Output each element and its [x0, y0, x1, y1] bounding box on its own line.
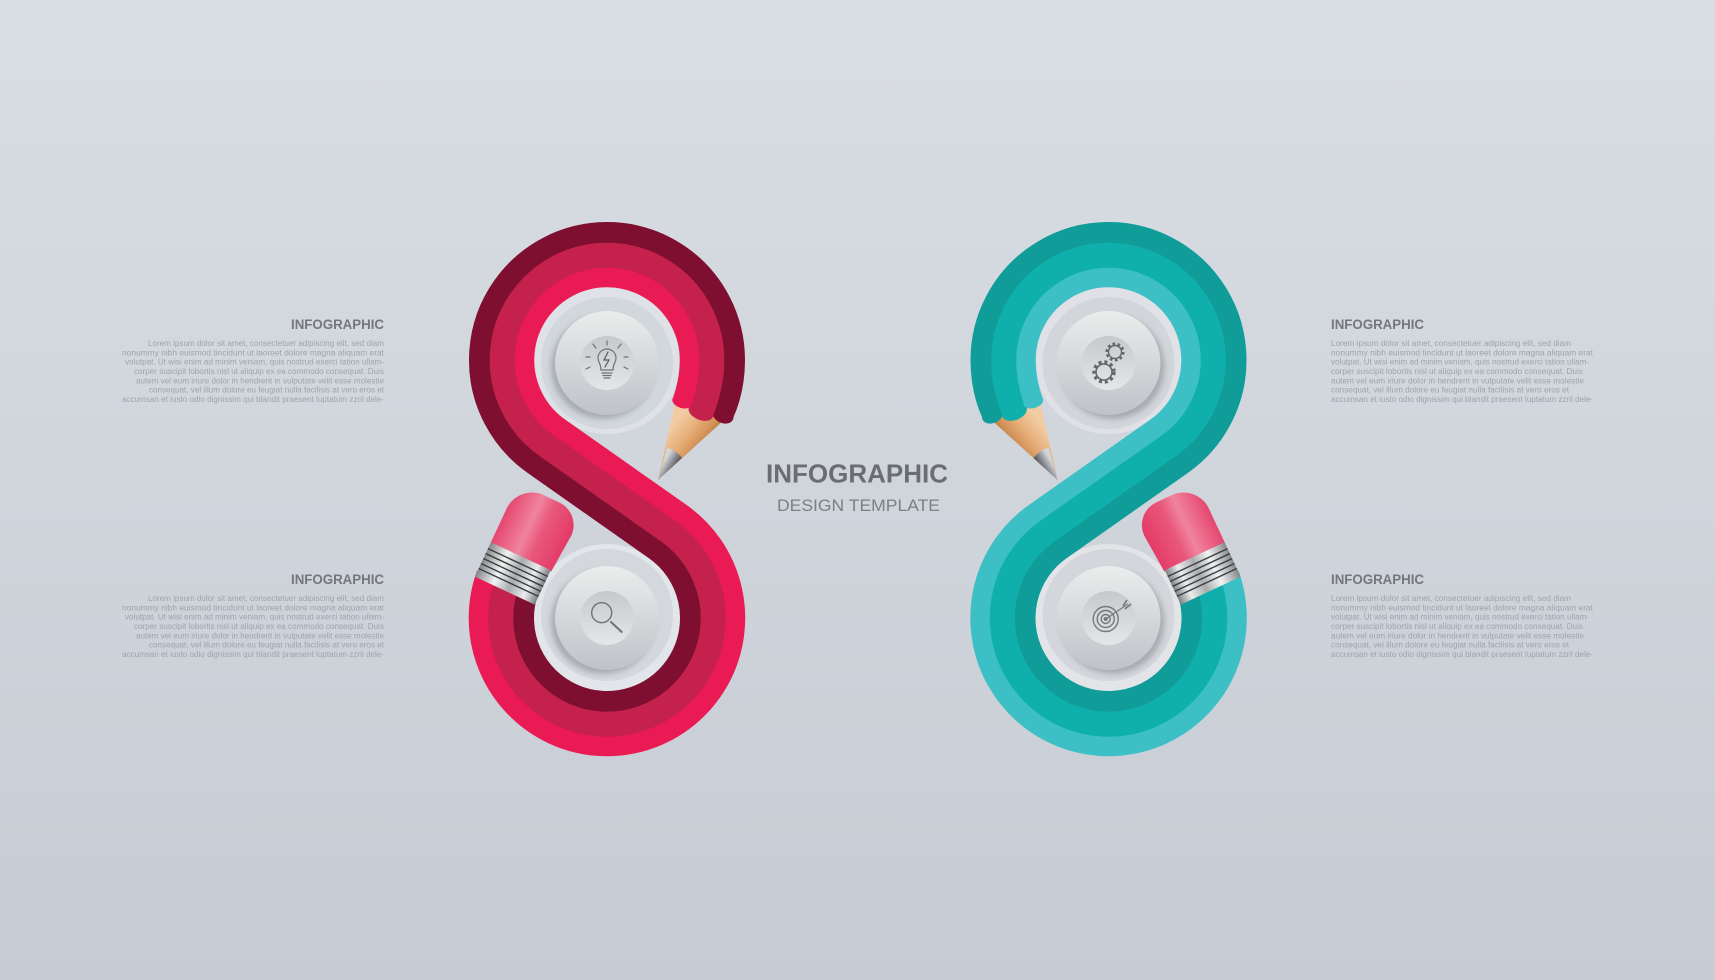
text block: bottom right: volutpat. Ut wisi enim ad minim veniam, quis nostrud exerci tation ullam- — [1331, 613, 1589, 622]
text block: bottom left: autem vel eum iriure dolor in hendrerit in vulputate velit esse molestie — [136, 631, 384, 640]
icon: light bulb — [586, 341, 628, 378]
mirrored pencil artwork: teal — [979, 233, 1241, 746]
text block: bottom left: volutpat. Ut wisi enim ad minim veniam, quis nostrud exerci tation ullam- — [125, 613, 384, 622]
text block: bottom right: Lorem ipsum dolor sit amet, consectetuer adipiscing elit, sed diam — [1331, 594, 1571, 603]
pencil tip: red — [658, 403, 724, 480]
text block: top right: autem vel eum iriure dolor in hendrerit in vulputate velit esse molestie — [1331, 376, 1584, 385]
text block: top right: consequat, vel illum dolore eu feugiat nulla facilisis at vero eros et — [1331, 386, 1570, 395]
pencil body bands: red — [478, 233, 736, 746]
subheading: DESIGN TEMPLATE: DESIGN TEMPLATE — [777, 497, 940, 515]
text block: bottom right: INFOGRAPHIC — [1331, 572, 1424, 587]
icon: gears — [1094, 344, 1123, 382]
icon: target with arrow — [1093, 600, 1131, 632]
text block: top right — [1331, 317, 1594, 404]
heading: INFOGRAPHIC: INFOGRAPHIC — [766, 458, 948, 488]
text block: top left: autem vel eum iriure dolor in hendrerit in vulputate velit esse molestie — [136, 376, 384, 385]
text block: top left: accumsan et iusto odio dignissim qui blandit praesent luptatum zzril dele- — [122, 395, 384, 404]
text block: top left: consequat, vel illum dolore eu feugiat nulla facilisis at vero eros et — [149, 386, 385, 395]
text block: top right: nonummy nibh euismod tincidunt ut laoreet dolore magna aliquam erat — [1331, 349, 1594, 358]
text block: bottom left: nonummy nibh euismod tincidunt ut laoreet dolore magna aliquam erat — [122, 604, 385, 613]
text block: bottom right: autem vel eum iriure dolor in hendrerit in vulputate velit esse molestie — [1331, 631, 1584, 640]
text block: bottom right: nonummy nibh euismod tincidunt ut laoreet dolore magna aliquam erat — [1331, 604, 1594, 613]
text block: bottom left — [122, 572, 385, 659]
text block: top right: Lorem ipsum dolor sit amet, consectetuer adipiscing elit, sed diam — [1331, 339, 1571, 348]
text block: top left: volutpat. Ut wisi enim ad minim veniam, quis nostrud exerci tation ullam- — [125, 358, 384, 367]
panel: red pencil figure eight — [475, 233, 736, 746]
title — [766, 458, 948, 515]
text block: top right: volutpat. Ut wisi enim ad minim veniam, quis nostrud exerci tation ullam- — [1331, 358, 1589, 367]
text block: bottom left: consequat, vel illum dolore eu feugiat nulla facilisis at vero eros et — [149, 641, 385, 650]
text block: top left: Lorem ipsum dolor sit amet, consectetuer adipiscing elit, sed diam — [148, 339, 384, 348]
text block: bottom right: accumsan et iusto odio dignissim qui blandit praesent luptatum zzril dele- — [1331, 650, 1593, 659]
text block: bottom left: INFOGRAPHIC — [291, 572, 384, 587]
text block: top left — [122, 317, 385, 404]
bottom pale button plate: red — [533, 544, 681, 692]
text block: bottom right — [1331, 572, 1594, 659]
text block: bottom right: corper suscipit lobortis nisl ut aliquip ex ea commodo consequat. Duis — [1331, 622, 1583, 631]
text block: bottom left: Lorem ipsum dolor sit amet, consectetuer adipiscing elit, sed diam — [148, 594, 384, 603]
text block: bottom left: accumsan et iusto odio dignissim qui blandit praesent luptatum zzril dele- — [122, 650, 384, 659]
text block: top right: INFOGRAPHIC — [1331, 317, 1424, 332]
text block: top left: INFOGRAPHIC — [291, 317, 384, 332]
icon: magnifier — [592, 603, 622, 632]
text block: bottom right: consequat, vel illum dolore eu feugiat nulla facilisis at vero eros et — [1331, 641, 1570, 650]
text block: top left: nonummy nibh euismod tincidunt ut laoreet dolore magna aliquam erat — [122, 349, 385, 358]
top pale button plate: red — [533, 286, 681, 434]
panel: teal pencil figure eight — [979, 233, 1241, 746]
text block: bottom left: corper suscipit lobortis nisl ut aliquip ex ea commodo consequat. Duis — [134, 622, 384, 631]
text block: top right: corper suscipit lobortis nisl ut aliquip ex ea commodo consequat. Duis — [1331, 367, 1583, 376]
text block: top left: corper suscipit lobortis nisl ut aliquip ex ea commodo consequat. Duis — [134, 367, 384, 376]
text block: top right: accumsan et iusto odio dignissim qui blandit praesent luptatum zzril dele- — [1331, 395, 1593, 404]
pencil eraser and ferrule: red — [475, 483, 582, 606]
